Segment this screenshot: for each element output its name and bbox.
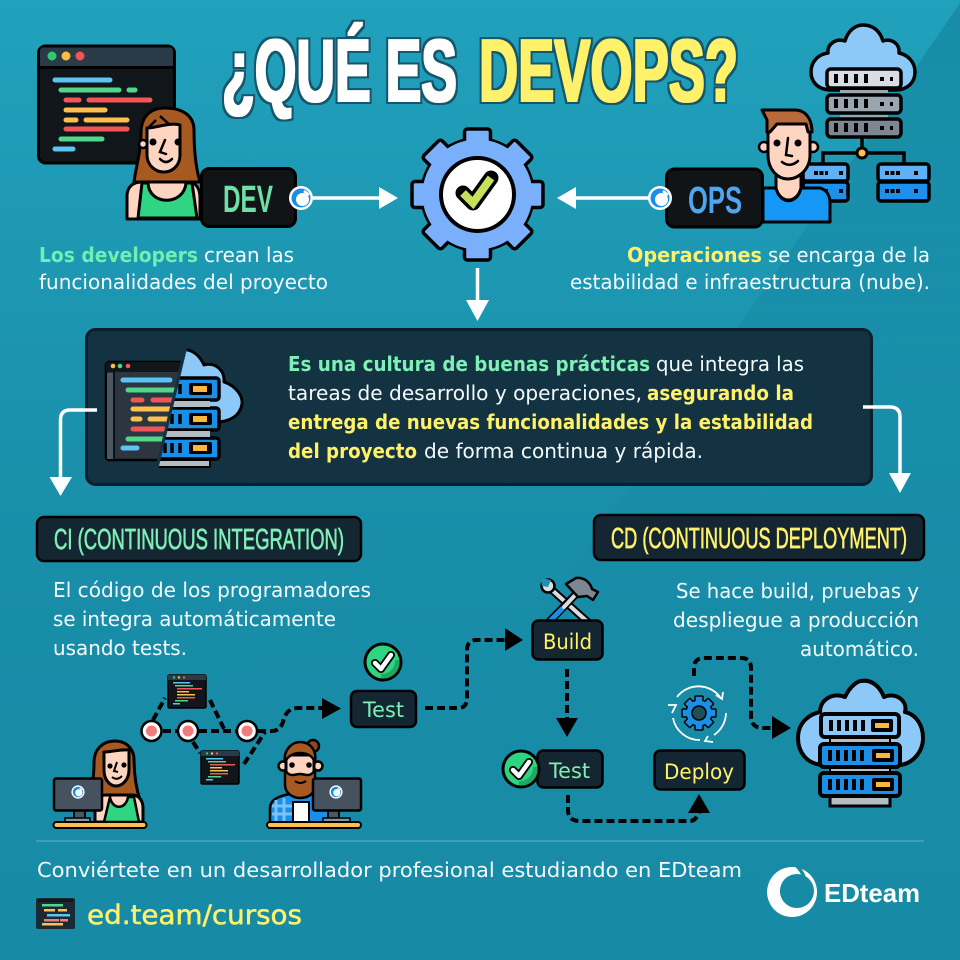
arrow: box to CD: [863, 407, 911, 493]
text: operaciones: Operaciones: [627, 243, 762, 267]
arrow: ops to gear: [557, 186, 672, 210]
node: test: [351, 691, 416, 727]
text: CD description: automático.: [800, 637, 919, 661]
icon: woman at computer: [54, 741, 146, 828]
arrow: deploy to cloud: [694, 658, 791, 739]
icon: gear with check: [412, 129, 543, 260]
text: definition: de forma continua y rápida.: [424, 439, 703, 463]
arrow: dev to gear: [289, 186, 398, 210]
text: definition: [288, 352, 813, 463]
logo: EDteam: [767, 866, 920, 917]
node: test with check: Test: [548, 759, 590, 783]
title: ¿QUÉ ES: [222, 21, 457, 120]
title: DEVOPS?: [479, 21, 738, 120]
node: deploy: Deploy: [664, 760, 734, 784]
node: deploy: [654, 750, 744, 790]
text: definition: entrega de nuevas funcionalidades y la estabilidad: [288, 410, 813, 434]
text: operaciones: estabilidad e infraestructura (nube).: [570, 270, 930, 294]
node: test: Test: [362, 698, 404, 722]
DEV label: [202, 168, 296, 226]
text: CI description: usando tests.: [53, 636, 187, 660]
icon: bearded man at computer: [267, 740, 361, 828]
text: definition: tareas de desarrollo y operaciones,: [288, 381, 642, 405]
node: build: [532, 620, 602, 660]
icon: footer code: [36, 898, 75, 929]
logo: EDteam: EDteam: [824, 878, 920, 908]
arrow: test to deploy: [568, 794, 710, 821]
arrow: gear to box: [466, 268, 489, 321]
text: CD description: [673, 579, 919, 661]
node: build: Build: [543, 630, 592, 654]
text: definition: asegurando la: [647, 381, 794, 405]
text: CI description: se integra automáticamente: [53, 607, 336, 631]
text: operaciones: [570, 243, 930, 294]
arrow: box to CI: [50, 410, 97, 496]
icon: code and cloud split: [106, 342, 242, 468]
icon: production cloud: [798, 681, 923, 806]
node: test with check: [503, 750, 602, 788]
chart: branch flow: [142, 675, 341, 784]
icon: gear cycle: [668, 686, 726, 742]
text: footer call to action: Conviértete en un desarrollador profesional estudiando en EDteam: [37, 858, 742, 882]
heading: CI: CI (CONTINUOUS INTEGRATION): [54, 524, 344, 556]
icon: woman developer: [127, 108, 200, 219]
arrow: build to test: [556, 669, 578, 737]
footer divider: [36, 840, 924, 842]
text: developers: crean las: [204, 243, 294, 267]
text: definition: del proyecto: [288, 439, 417, 463]
text: definition: que integra las: [656, 352, 804, 376]
icon: check test: [365, 644, 401, 680]
text: CD description: despliegue a producción: [673, 608, 919, 632]
text: developers: Los developers: [39, 243, 198, 267]
text: CI description: [53, 578, 371, 660]
icon: cloud with servers: [803, 25, 929, 201]
text: definition: Es una cultura de buenas prácticas: [288, 352, 650, 376]
OPS label: OPS: [688, 180, 742, 222]
icon: operations man: [759, 110, 830, 222]
text: operaciones: se encarga de la: [768, 243, 930, 267]
icon: tools: [541, 578, 598, 624]
text: CD description: Se hace build, pruebas y: [676, 579, 919, 603]
icon: code window: [38, 46, 175, 163]
text: developers: funcionalidades del proyecto: [39, 270, 328, 294]
text: developers: [39, 243, 328, 294]
heading: CI: [37, 517, 361, 561]
DEV label: DEV: [223, 179, 273, 221]
arrow: test to build: [425, 628, 523, 708]
panel: definition: [86, 330, 872, 484]
OPS label: [666, 169, 762, 227]
link: courses: ed.team/cursos: [87, 900, 302, 931]
heading: CD: [594, 515, 924, 560]
text: CI description: El código de los programadores: [53, 578, 371, 602]
